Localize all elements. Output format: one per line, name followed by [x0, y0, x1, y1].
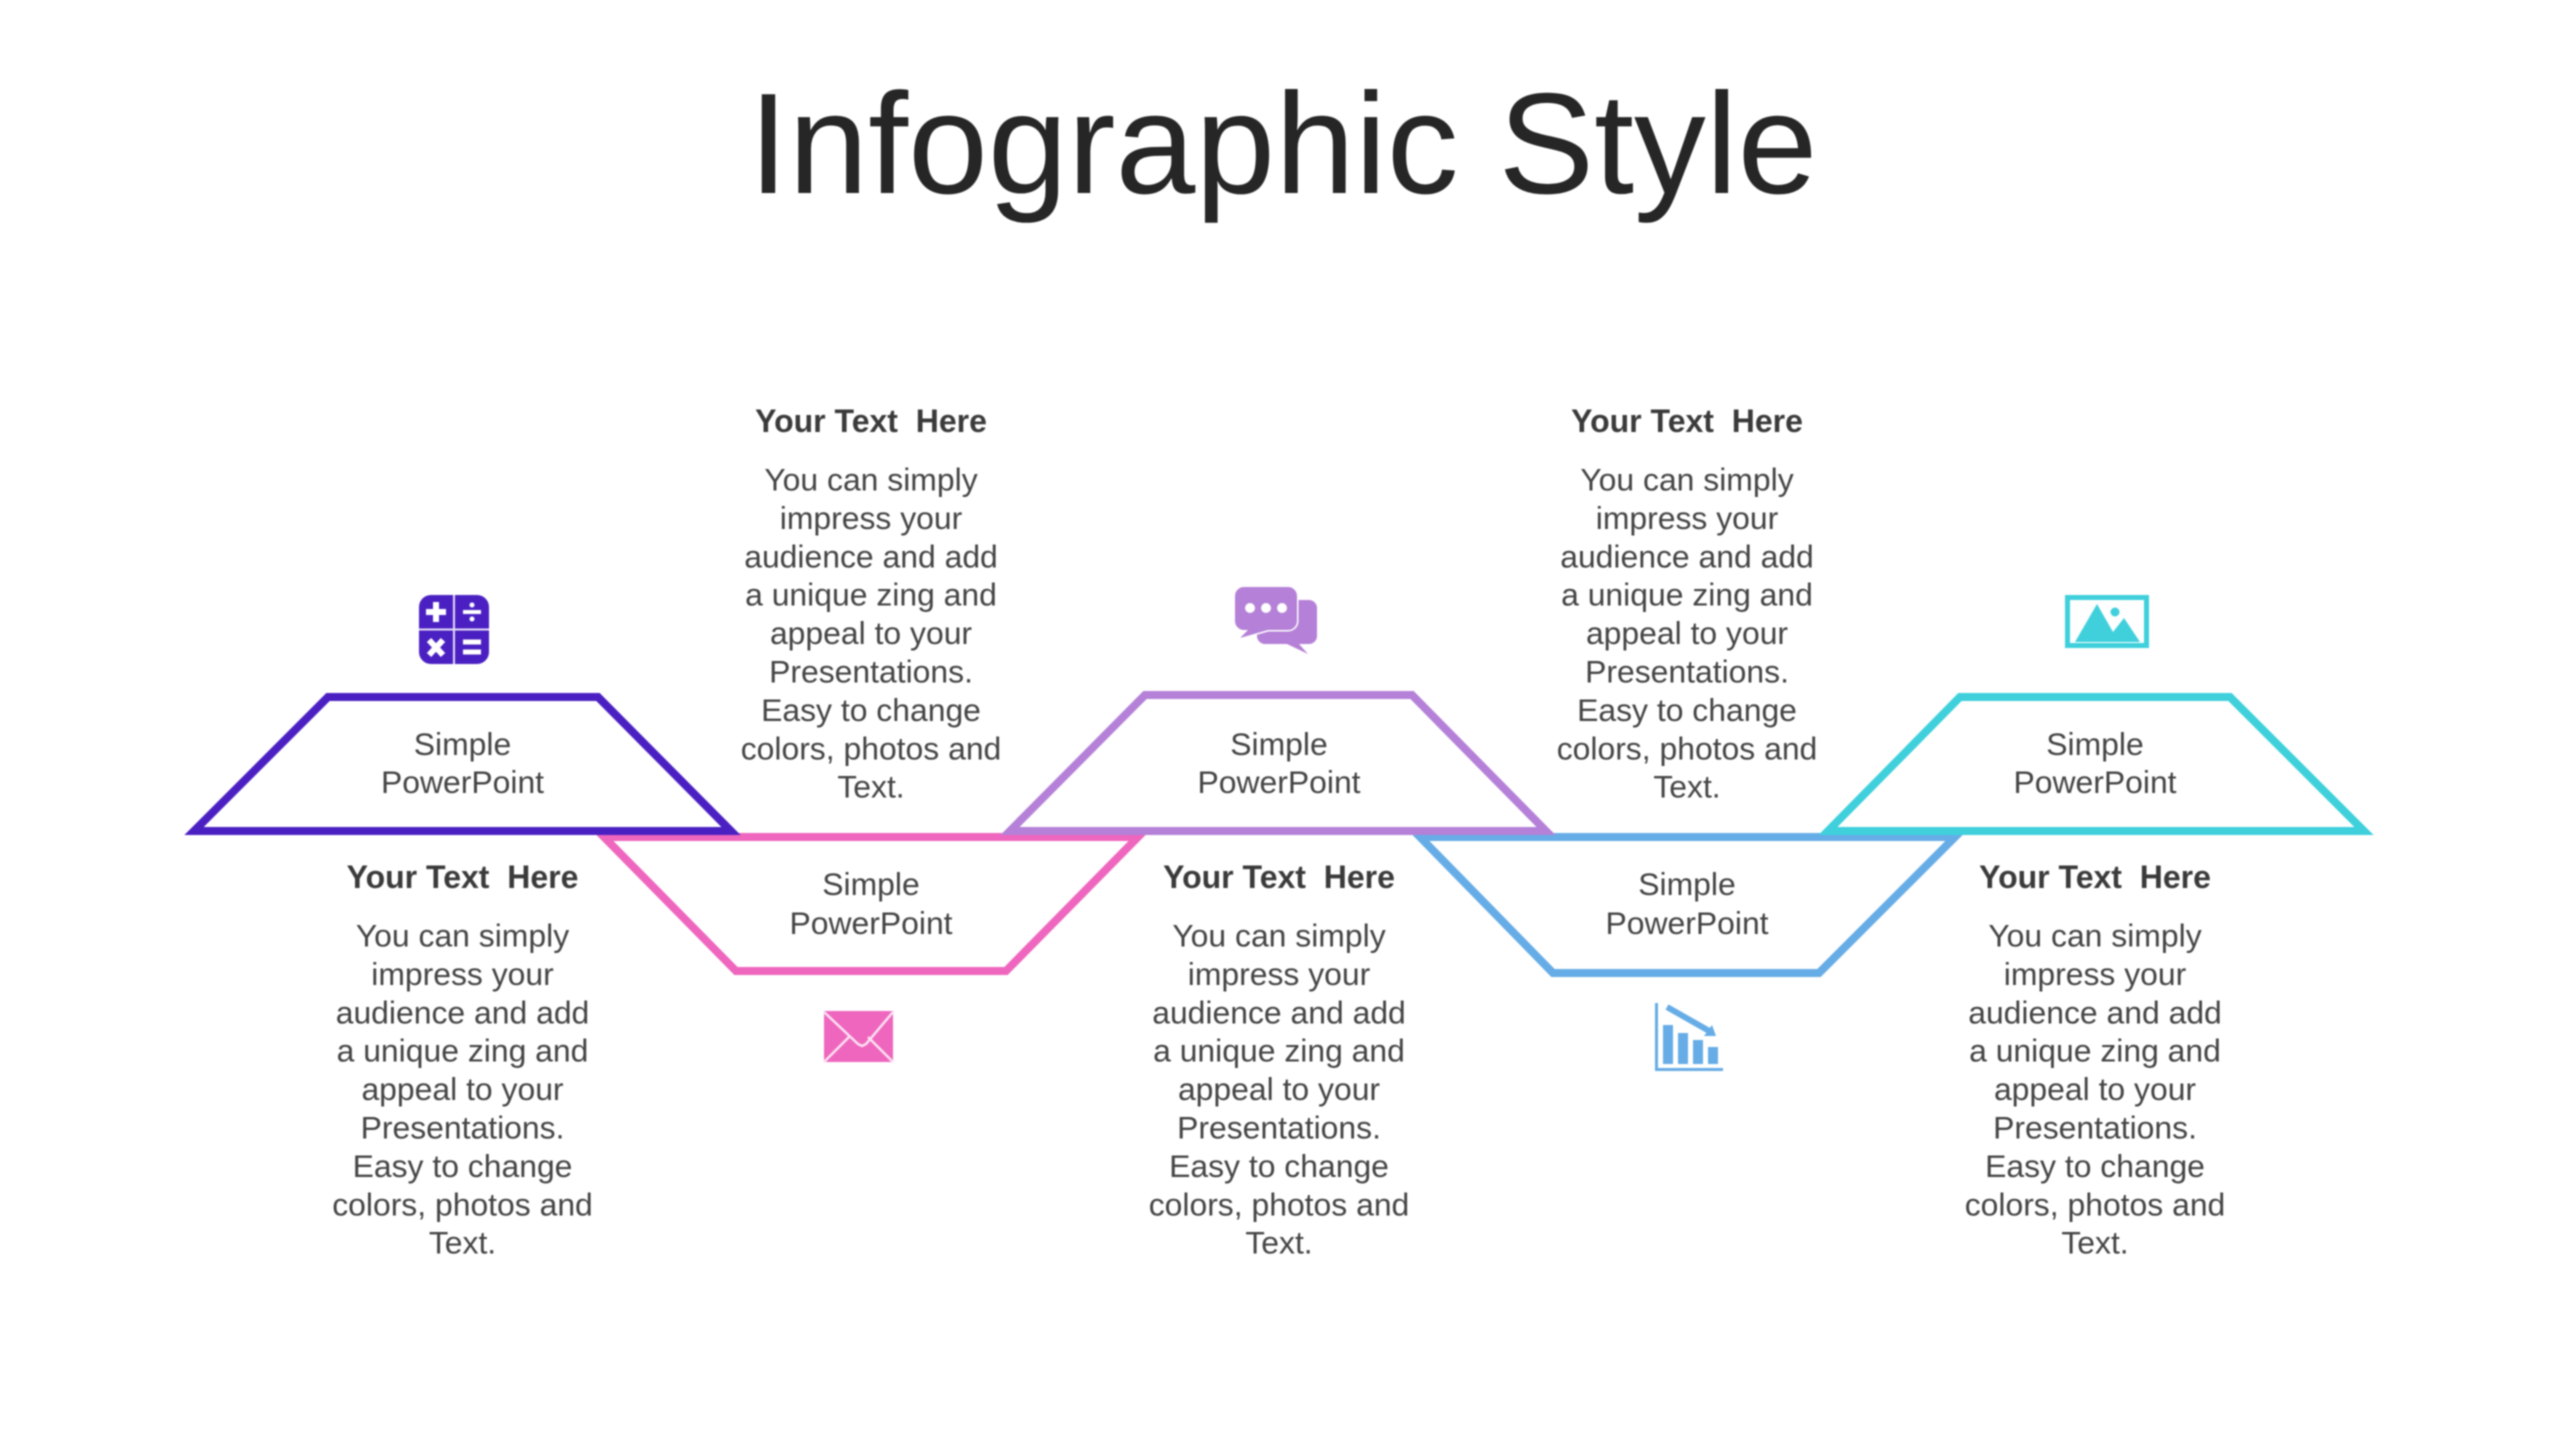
step 1 trapezoid: violet [194, 697, 731, 831]
text block 2: audience and add [744, 538, 998, 574]
step 4 label [1605, 866, 1769, 941]
step 2 label: PowerPoint [789, 905, 953, 941]
step 5 label: Simple [2046, 726, 2144, 762]
step 1 label: PowerPoint [381, 764, 544, 800]
text block 2: Easy to change [761, 692, 981, 728]
text block 5: appeal to your [1994, 1071, 2196, 1107]
text block 1: colors, photos and [332, 1186, 593, 1222]
text block 3: impress your [1188, 956, 1371, 992]
step 3 label [1197, 726, 1361, 800]
text block 4: a unique zing and [1561, 577, 1813, 613]
text block 5: a unique zing and [1969, 1033, 2221, 1069]
text block 3: a unique zing and [1153, 1033, 1405, 1069]
text block 2 [741, 403, 1001, 805]
text block 4: audience and add [1560, 538, 1814, 574]
text block 5: Text. [2061, 1225, 2129, 1261]
text block 2: a unique zing and [745, 577, 997, 613]
text block 1: Text. [429, 1225, 496, 1261]
text block 3: audience and add [1152, 994, 1406, 1030]
text block 5: Easy to change [1985, 1148, 2205, 1184]
step 2 label: Simple [822, 866, 920, 902]
text block 3 [1149, 859, 1409, 1261]
text block 4 [1557, 403, 1817, 805]
text block 5: audience and add [1968, 994, 2222, 1030]
text block 4: Easy to change [1577, 692, 1797, 728]
text block 1: Presentations. [361, 1110, 564, 1146]
text block 5: impress your [2004, 956, 2187, 992]
text block 1: a unique zing and [337, 1033, 588, 1069]
step 4 label: Simple [1638, 866, 1736, 902]
text block 3: appeal to your [1178, 1071, 1380, 1107]
text block 1: audience and add [336, 994, 589, 1030]
text block 1: impress your [371, 956, 554, 992]
icon: picture [2068, 598, 2146, 646]
text block 3: You can simply [1172, 918, 1386, 954]
text block 2: You can simply [764, 462, 978, 498]
step 4 label: PowerPoint [1605, 905, 1769, 941]
text block 5 [1965, 859, 2225, 1261]
icon: envelope [824, 1011, 893, 1062]
step 5 label [2013, 726, 2177, 800]
text block 1 [332, 859, 593, 1261]
text block 4: impress your [1596, 500, 1779, 536]
step 1 label: Simple [414, 726, 511, 762]
text block 3: Text. [1245, 1225, 1313, 1261]
text block 5: Presentations. [1993, 1110, 2197, 1146]
text block 1: appeal to your [361, 1071, 564, 1107]
text block 2: Text. [837, 769, 905, 805]
text block 4: appeal to your [1586, 615, 1788, 651]
text block 1: You can simply [356, 918, 569, 954]
text block 5: You can simply [1988, 918, 2202, 954]
step 3 trapezoid: lilac [1010, 695, 1546, 831]
text block 1: Easy to change [353, 1148, 572, 1184]
step 3 label: PowerPoint [1197, 764, 1361, 800]
text block 2: impress your [780, 500, 963, 536]
text block 2: Presentations. [769, 654, 973, 690]
step 5 trapezoid: cyan [1828, 697, 2364, 831]
text block 1: Your Text Here [347, 859, 578, 895]
icon: bar chart [1655, 1003, 1723, 1071]
text block 4: Text. [1653, 769, 1721, 805]
step 1 label [381, 726, 544, 800]
title: Infographic Style [749, 64, 1817, 224]
text block 3: colors, photos and [1149, 1186, 1409, 1222]
text block 2: colors, photos and [741, 730, 1001, 766]
step 3 label: Simple [1230, 726, 1328, 762]
text block 5: colors, photos and [1965, 1186, 2225, 1222]
text block 4: colors, photos and [1557, 730, 1817, 766]
icon: calculator [419, 595, 489, 664]
step 4 trapezoid: blue [1420, 837, 1955, 973]
text block 4: Your Text Here [1571, 403, 1803, 439]
text block 3: Easy to change [1169, 1148, 1389, 1184]
text block 3: Presentations. [1177, 1110, 1381, 1146]
step 2 label [789, 866, 953, 941]
text block 5: Your Text Here [1979, 859, 2211, 895]
text block 4: You can simply [1580, 462, 1794, 498]
step 2 trapezoid: pink [604, 837, 1138, 971]
text block 4: Presentations. [1585, 654, 1789, 690]
step 5 label: PowerPoint [2013, 764, 2177, 800]
text block 3: Your Text Here [1163, 859, 1395, 895]
text block 2: Your Text Here [755, 403, 987, 439]
icon: speech bubbles [1235, 587, 1317, 654]
text block 2: appeal to your [770, 615, 972, 651]
